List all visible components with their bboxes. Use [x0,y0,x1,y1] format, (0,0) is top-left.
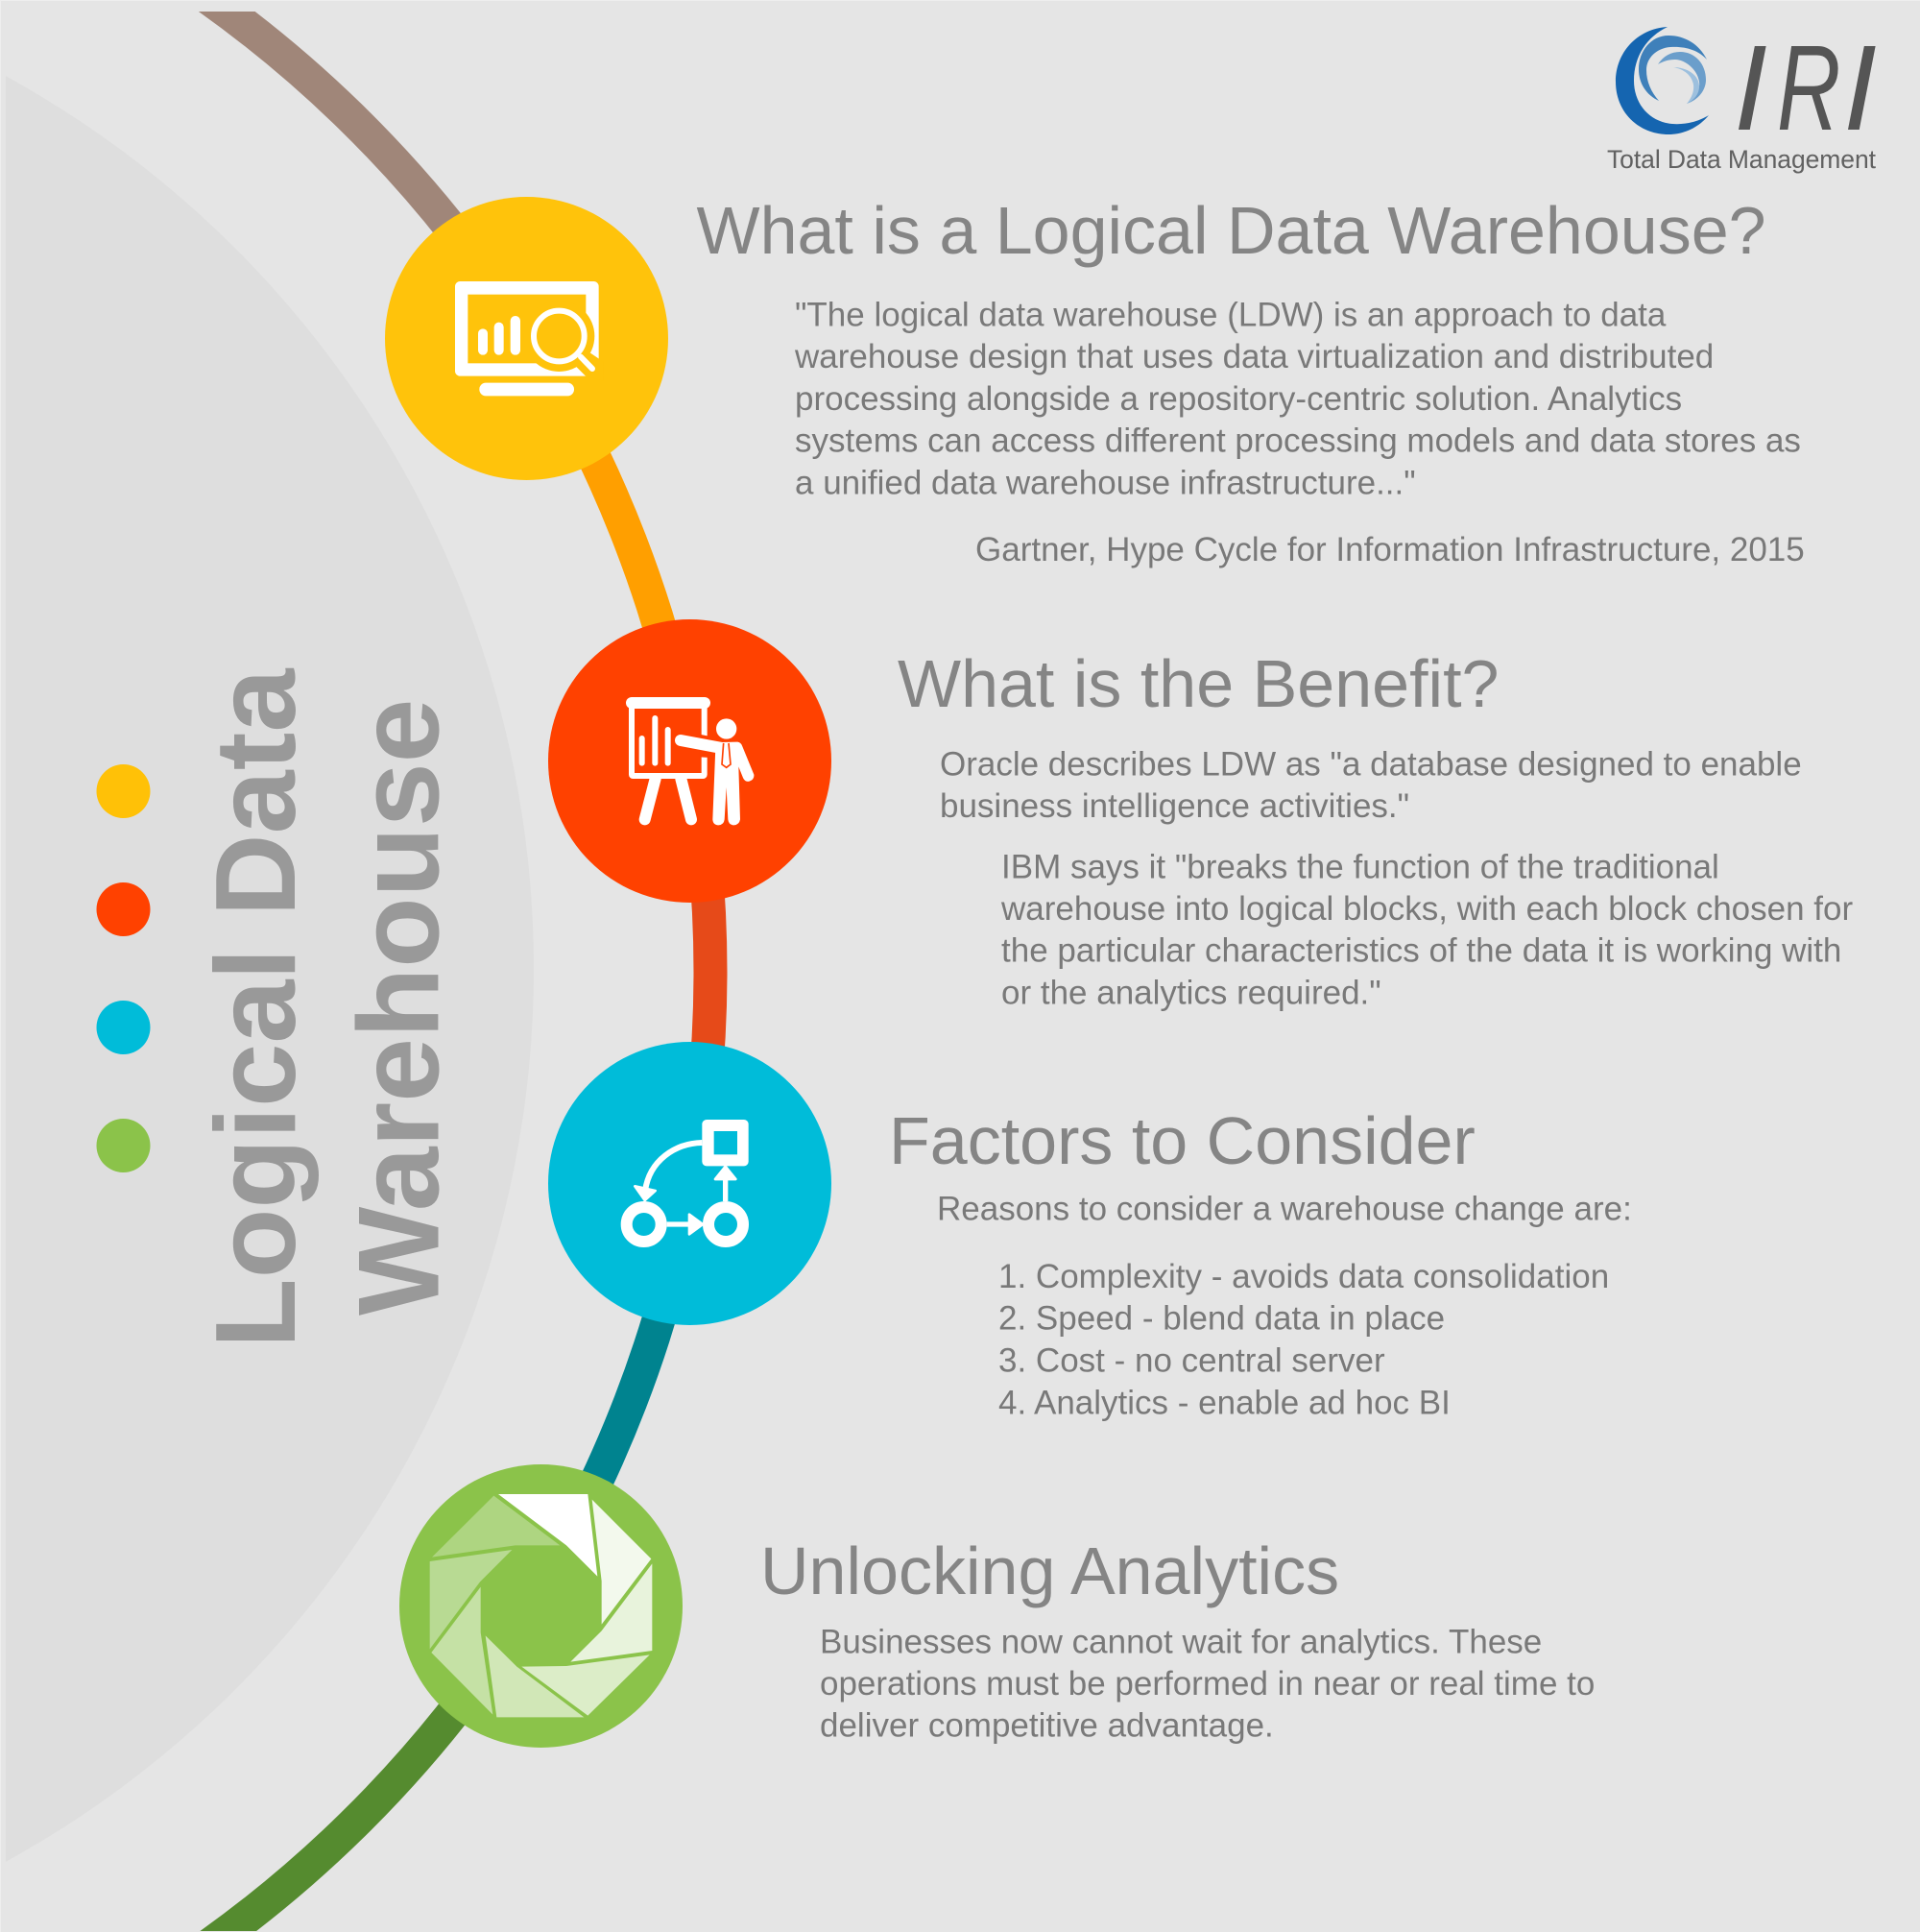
logo wordmark: I [1734,20,1767,156]
quote: processing alongside a repository-centric solution. Analytics [795,380,1682,418]
vertical title: Logical Data [192,668,320,1348]
icon circle: presenter at board [548,619,831,903]
IBM text [1000,848,1853,1011]
logo wordmark: R [1777,21,1840,156]
list: 4. Analytics - enable ad hoc BI [998,1385,1451,1421]
IBM text: the particular characteristics of the data it is working with [1001,932,1841,970]
icon circle: process flow [548,1042,831,1325]
vertical title: Warehouse [334,699,463,1316]
intro: Reasons to consider a warehouse change are: [937,1191,1632,1228]
heading: What is the Benefit? [898,646,1499,721]
heading: Factors to Consider [889,1103,1476,1178]
logo swirl [1616,27,1709,134]
oracle text: business intelligence activities." [940,787,1409,825]
legend dots [96,764,150,1172]
section 2: benefit [898,646,1853,1011]
section 3: factors [889,1103,1632,1421]
list: 1. Complexity - avoids data consolidation [998,1258,1609,1295]
vertical title [192,668,463,1348]
quote [794,296,1801,501]
paragraph: deliver competitive advantage. [820,1707,1274,1745]
oracle text: Oracle describes LDW as "a database designed to enable [940,745,1802,784]
quote: "The logical data warehouse (LDW) is an approach to data [795,296,1667,333]
oracle text [940,745,1802,825]
paragraph [820,1623,1595,1745]
quote: systems can access different processing models and data stores as [795,423,1801,459]
logo wordmark: I [1843,20,1877,156]
IBM text: or the analytics required." [1001,974,1381,1011]
logo tagline: Total Data Management [1607,145,1877,174]
IBM text: warehouse into logical blocks, with each block chosen for [1000,890,1853,928]
IBM text: IBM says it "breaks the function of the traditional [1001,848,1719,885]
icon circle: monitor with magnifier [385,197,668,480]
list: 2. Speed - blend data in place [998,1300,1445,1338]
background semicircle panel [0,0,534,1932]
icon circle: camera aperture [399,1464,683,1748]
IRI logo [1607,20,1877,174]
timeline arc [199,12,728,1931]
quote: warehouse design that uses data virtualization and distributed [794,338,1714,375]
logo wordmark [1734,20,1877,156]
quote: a unified data warehouse infrastructure..." [795,464,1416,501]
heading: What is a Logical Data Warehouse? [697,193,1766,268]
section 4: analytics [760,1534,1595,1745]
list [998,1258,1609,1421]
list: 3. Cost - no central server [998,1342,1385,1379]
heading: Unlocking Analytics [760,1534,1339,1608]
paragraph: Businesses now cannot wait for analytics. These [820,1623,1542,1660]
attribution: Gartner, Hype Cycle for Information Infrastructure, 2015 [975,531,1805,568]
section 1: what is LDW [697,193,1805,568]
paragraph: operations must be performed in near or real time to [820,1665,1595,1703]
